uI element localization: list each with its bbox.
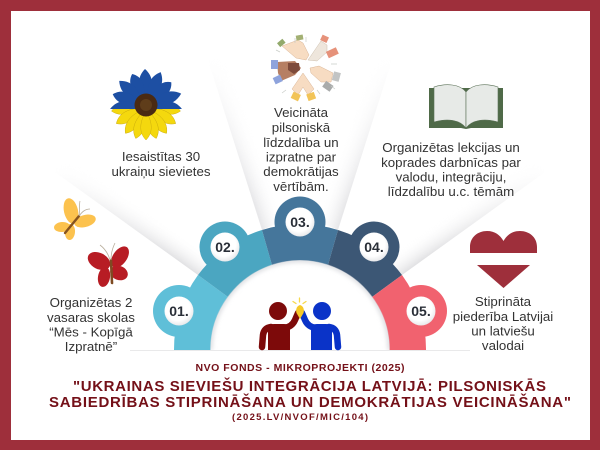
heading: project title [49,377,571,411]
icon: open book [429,85,503,129]
segment 04: 04. [364,239,384,255]
icon: sunflower [110,69,183,140]
segment 04 [328,222,402,297]
text: item 01: vasaras skolas [47,310,135,325]
icon: circle of hands [271,35,341,101]
top-left hands [277,35,309,60]
segment 05: 05. [411,303,431,319]
text: item 02: Iesaistītas 30 [122,149,200,164]
segment 03 [262,196,338,265]
icon: spark [293,298,306,304]
right hands [310,66,341,92]
text: item 01: Organizētas 2 [50,295,132,310]
semicircular diagram [153,196,447,350]
top-right hands [308,35,339,61]
text: project reference: (2025.LV/NVOF/MIC/104) [232,412,368,423]
text: item 03: izpratne par [266,150,337,164]
bottom hands [291,73,316,101]
text: item 04: koprades darbnīcas par [381,155,521,170]
segment 01 [153,275,228,350]
text: item 05: Stiprināta [475,294,532,309]
text: item 04: valodu, integrāciju, [396,170,506,184]
segment 02: 02. [215,239,235,255]
text: item 03: vērtībām. [273,179,329,194]
icon: two people high five [262,298,338,350]
red person [262,302,298,350]
light rays [90,113,510,275]
text: item 05: valodai [482,338,524,353]
baseline [130,350,470,352]
text: item 04: Organizētas lekcijas un [382,140,520,155]
text: item 03: demokrātijas [263,164,339,179]
blue person [302,302,338,350]
segment 03: 03. [290,214,310,230]
text: item 05: piederība Latvijai [453,309,553,324]
segment 01: 01. [169,303,189,319]
text: item 05: un latviešu [471,324,535,338]
text: item 04: līdzdalību u.c. tēmām [388,184,514,199]
text: item 03: Veicināta [274,105,329,120]
heading: project title: SABIEDRĪBAS STIPRINĀŠANA UN DEMOKRĀTIJAS VEICINĀŠANA" [49,393,571,411]
segment 02 [198,222,272,297]
left hands [271,60,301,84]
icon: Latvian flag heart [470,231,537,288]
text: item 01: Izpratnē” [65,339,117,354]
hub inner shadow [210,260,390,350]
segment 05 [372,275,447,350]
text: item 01: “Mēs - Kopīgā [49,324,133,340]
text: item 03: pilsoniskā [272,120,331,135]
yellow hand glow [296,305,304,319]
text: item 02: ukraiņu sievietes [111,164,211,179]
motion strokes [276,37,337,94]
icon: red butterfly [85,243,133,288]
icon: yellow butterfly [54,197,97,240]
heading: programme: NVO FONDS - MIKROPROJEKTI (2025) [196,362,404,374]
text: item 03: līdzdalība un [263,135,339,150]
heading: project title: "UKRAINAS SIEVIEŠU INTEGRĀCIJA LATVIJĀ: PILSONISKĀS [73,377,546,395]
